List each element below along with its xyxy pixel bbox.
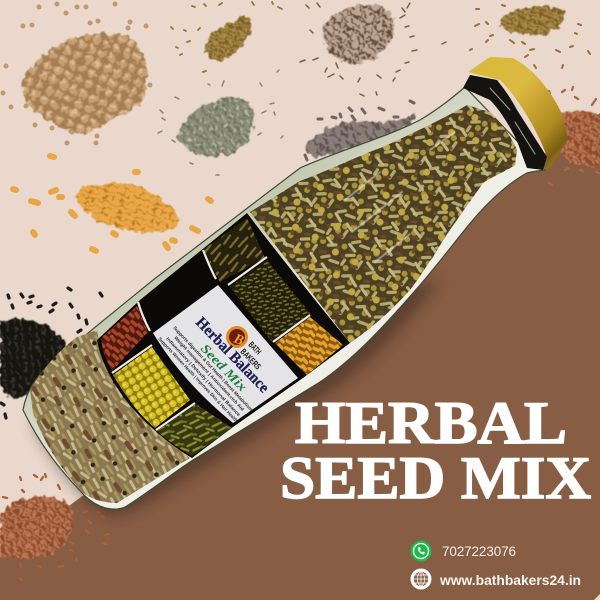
label: logo: B (231, 331, 246, 349)
white separators (112, 250, 310, 430)
seed pile: caraway top centre (171, 2, 282, 72)
contact: phone (410, 540, 516, 562)
label: Seed Mix: Seed Mix (198, 341, 251, 395)
panel: fenugreek (275, 317, 343, 375)
seed pile: fennel grey-green (158, 70, 283, 175)
label: benefit lines: Supports digestion & Gut Health | Boost Metabolism (172, 325, 254, 412)
seeds: tan mix at base (30, 330, 190, 503)
glass highlights (345, 132, 455, 262)
seed pile: flax right (549, 87, 600, 185)
icon: whatsapp (410, 540, 432, 562)
bottle (23, 57, 568, 515)
seed pile: blurred grey seeds (305, 101, 415, 160)
contact: website (410, 568, 581, 590)
panel: mustard (113, 347, 190, 428)
phone number: 7027223076 (442, 544, 516, 559)
seed pile: coriander (3, 4, 150, 143)
website url: www.bathbakers24.in (439, 573, 581, 588)
seed pile: ajwain top right (470, 5, 590, 68)
label band: black frame (97, 213, 350, 458)
neck: dark thread band (463, 75, 547, 170)
glass body (23, 87, 545, 509)
title line: SEED MIX: SEED MIX (280, 445, 591, 511)
label: brand name: BATH (247, 339, 263, 356)
label: brand name: BAKERS (239, 346, 263, 372)
label: Herbal Balance: Herbal Balance (192, 314, 272, 396)
label: white panel (153, 285, 298, 423)
seed pile: cumin dark (300, 3, 446, 96)
label: benefit lines: Inflammatory | Detoxify | Hormonal Balance (165, 336, 242, 418)
label: benefit lines: Supports Women Health | Improves Skin & Hair Health (157, 336, 239, 423)
title line: HERBAL: HERBAL (295, 390, 567, 456)
seed pile: nigella black (0, 288, 102, 418)
seeds: main mix (250, 105, 517, 343)
title (280, 390, 591, 511)
gold cap (468, 57, 568, 170)
label: brand name (239, 339, 263, 372)
bottle shadow (30, 280, 440, 515)
seed pile: flax bottom left (0, 474, 109, 580)
panel: green fennel (157, 404, 232, 456)
panel: flax (101, 306, 148, 371)
label: benefit lines: Weight management | Antioxidant-rich Aid (173, 335, 245, 412)
label: logo (226, 326, 248, 349)
panel: caraway (203, 218, 265, 282)
icon: globe (410, 568, 432, 590)
panel: dark ajwain (230, 260, 310, 342)
neck: glass reflections (490, 88, 535, 154)
seed pile: fenugreek orange (13, 156, 211, 251)
